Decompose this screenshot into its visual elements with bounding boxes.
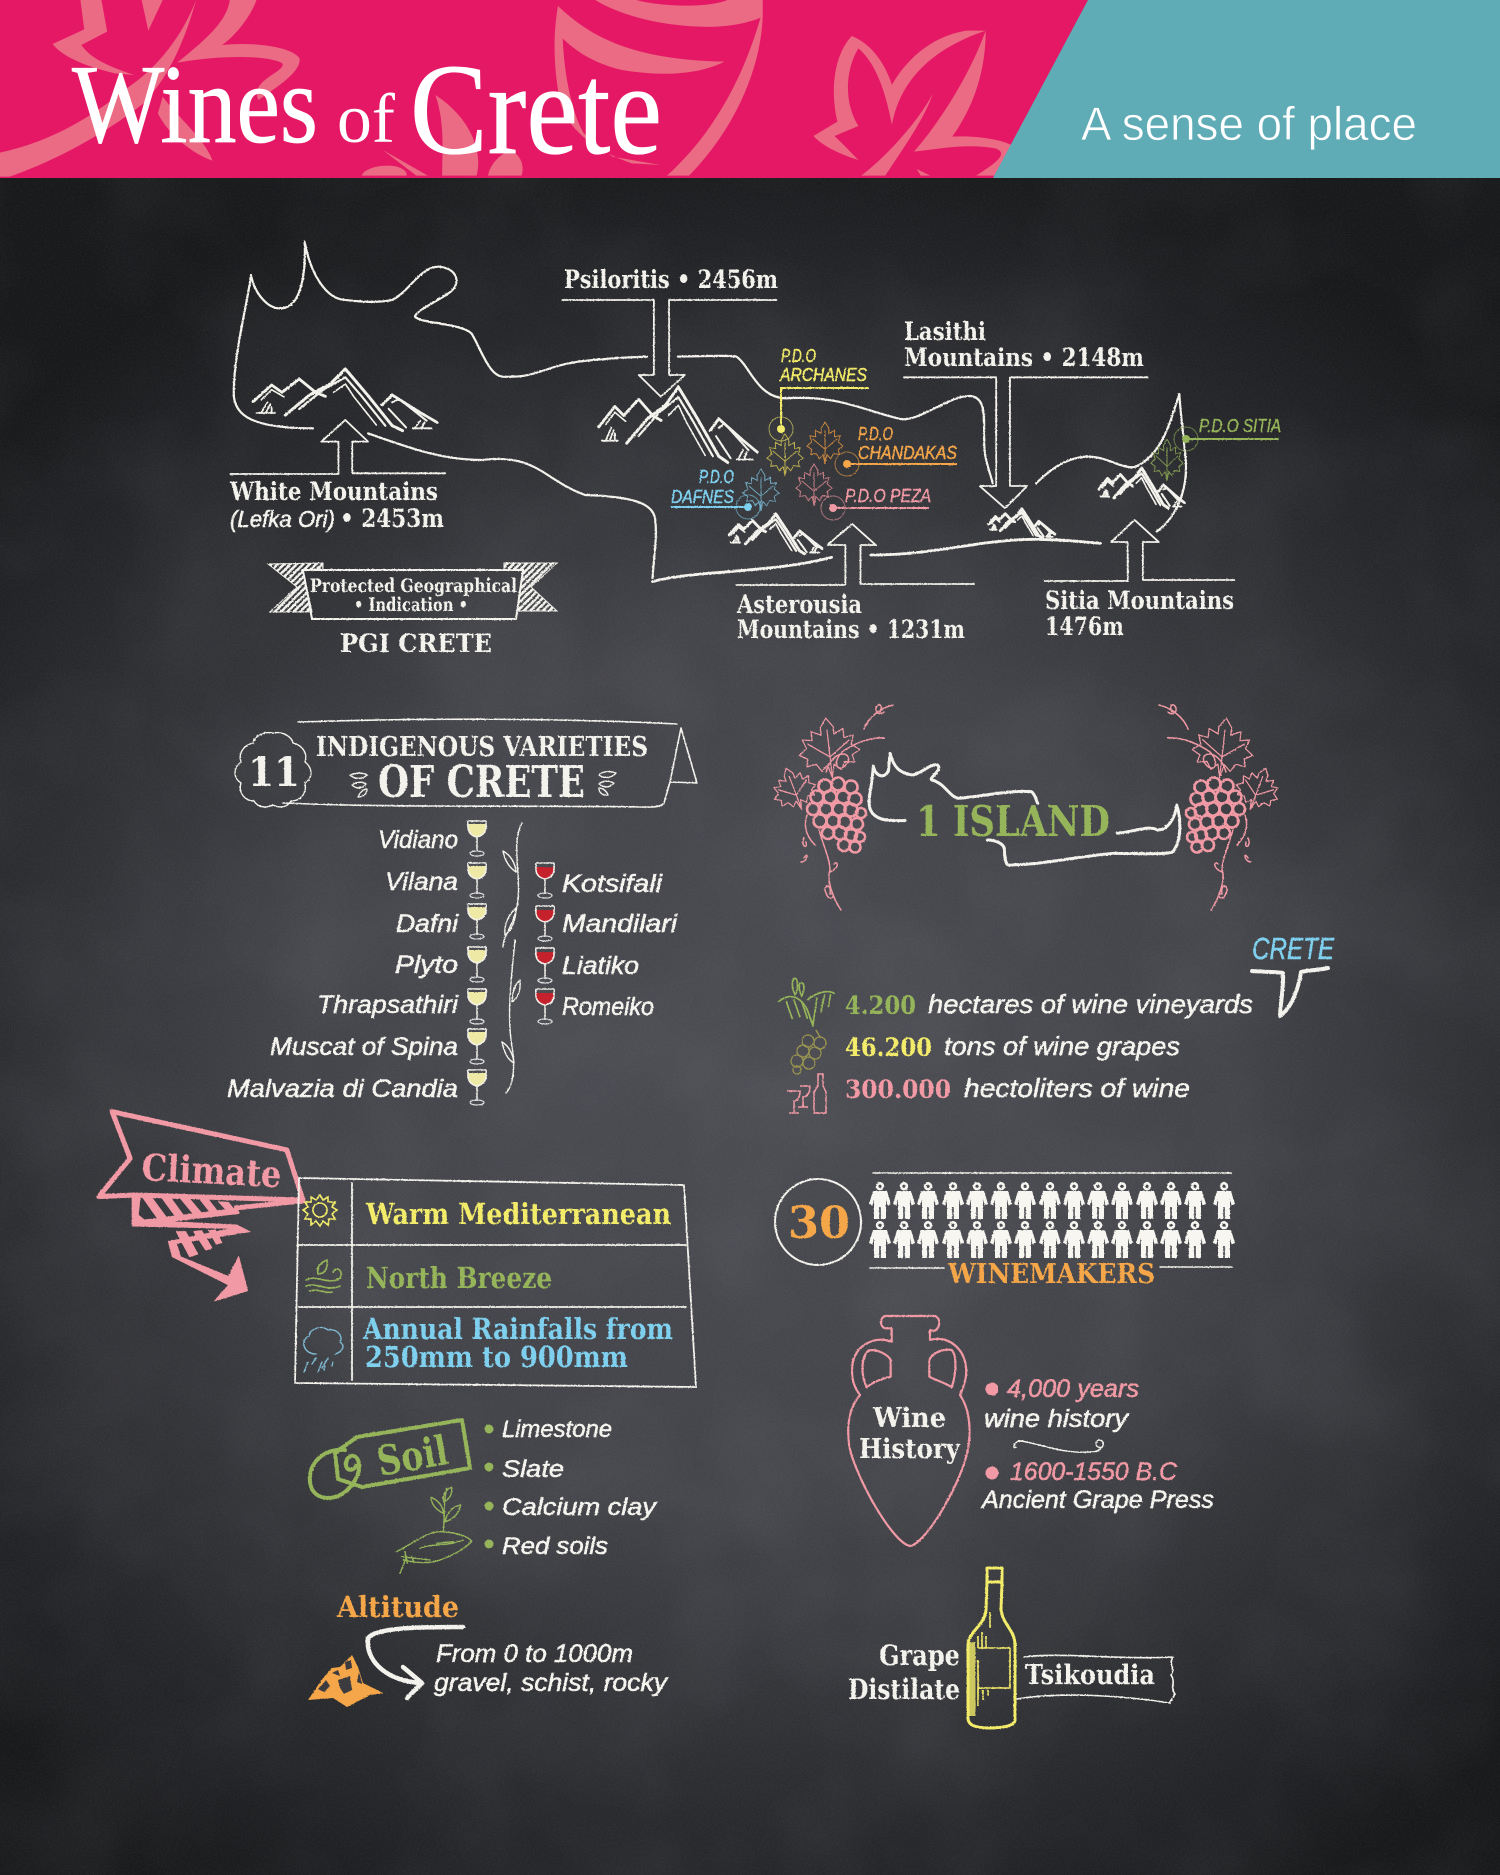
mountain labels: Psiloritis • 2456m: [564, 265, 778, 294]
climate flag: Climate: [141, 1145, 283, 1196]
ribbon shape: [268, 563, 557, 619]
scalloped badge: [235, 733, 311, 807]
CRETE callout: [1252, 931, 1334, 1016]
panel: winemakers: [775, 1173, 1235, 1290]
stat: grapes: [791, 1030, 1180, 1074]
white varieties: Vidiano: [378, 826, 458, 854]
climate table: [295, 1178, 696, 1387]
panel: wine history: [848, 1316, 1214, 1546]
stat: wine: 300.000: [845, 1075, 951, 1104]
red varieties: Kotsifali: [562, 870, 664, 898]
red varieties: [562, 870, 679, 1021]
map of Crete with mountains: [229, 242, 1281, 644]
stat: wine: hectoliters of wine: [964, 1073, 1190, 1103]
chalk content: [99, 242, 1334, 1728]
PGI label: PGI CRETE: [340, 629, 492, 658]
soil list: Limestone: [502, 1416, 612, 1443]
stat: vineyards: 4.200: [845, 991, 916, 1020]
mountain labels: Sitia Mountains: [1045, 586, 1234, 615]
PDO labels: CHANDAKAS: [858, 443, 957, 463]
varieties ribbon heading: [235, 719, 697, 808]
panel: 1 island: [766, 705, 1334, 1113]
icon: bottle: [968, 1568, 1015, 1728]
ribbon text: • Indication •: [354, 594, 468, 616]
red wine glasses: [536, 863, 554, 1024]
mountain labels: Mountains • 2148m: [904, 343, 1144, 372]
panel: winemakers: WINEMAKERS: [947, 1259, 1155, 1290]
PDO labels: P.D.O: [858, 424, 893, 444]
white varieties: Malvazia di Candia: [227, 1075, 458, 1103]
mountain labels: Mountains • 1231m: [737, 615, 965, 644]
bottle caption: Distilate: [848, 1673, 960, 1706]
rules: [870, 1173, 1232, 1268]
climate text: North Breeze: [366, 1261, 552, 1295]
PDO labels: P.D.O SITIA: [1199, 416, 1281, 436]
amphora label: Wine: [872, 1403, 946, 1434]
mountain icons: [253, 369, 1184, 554]
climate text: Annual Rainfalls from: [362, 1312, 673, 1346]
varieties ribbon heading: 11: [248, 749, 300, 796]
history facts: 1600-1550 B.C: [1010, 1458, 1178, 1486]
PGI Crete ribbon: [268, 563, 557, 658]
climate text: Warm Mediterranean: [365, 1197, 671, 1231]
PDO leaves: [743, 422, 1183, 511]
ribbon text: Protected Geographical: [310, 575, 517, 597]
Tsikoudia ribbon: Tsikoudia: [1025, 1660, 1155, 1691]
white varieties: Dafni: [396, 910, 460, 938]
PDO pointers: [671, 388, 1279, 520]
mountain labels: White Mountains: [229, 477, 438, 506]
panel: altitude: From 0 to 1000m: [436, 1640, 633, 1668]
history facts: [980, 1375, 1214, 1514]
badge: [775, 1179, 861, 1265]
mountain labels: Lasithi: [904, 317, 986, 346]
panel: indigenous varieties: [227, 719, 697, 1105]
stat: grapes: 46.200: [845, 1033, 932, 1062]
panel: altitude: Altitude: [336, 1590, 459, 1624]
people pictogram: [869, 1182, 1235, 1258]
title: of: [337, 81, 396, 158]
varieties ribbon heading: OF CRETE: [378, 757, 585, 808]
bottle caption: Grape: [879, 1639, 960, 1672]
amphora label: [859, 1403, 961, 1465]
white varieties: Plyto: [395, 951, 458, 979]
PDO labels: P.D.O: [699, 467, 734, 487]
panel: soil: Soil: [373, 1426, 452, 1486]
PDO labels: P.D.O PEZA: [845, 486, 931, 506]
PDO labels: P.D.O: [781, 346, 816, 366]
arrow: [368, 1627, 463, 1698]
icon: sun: [303, 1195, 337, 1226]
soil tag: [310, 1420, 470, 1498]
panel: soil: [310, 1416, 658, 1573]
soil list: Slate: [502, 1456, 564, 1483]
climate text: [362, 1197, 673, 1374]
panel: climate: [99, 1112, 696, 1387]
mountain labels: Asterousia: [736, 590, 862, 619]
ribbon text: [310, 575, 517, 616]
history facts: wine history: [984, 1405, 1130, 1433]
white varieties: Muscat of Spina: [270, 1033, 458, 1061]
Tsikoudia ribbon: [1017, 1655, 1175, 1703]
mountain labels: (Lefka Ori): [230, 506, 335, 532]
red varieties: Mandilari: [562, 910, 679, 938]
teal tagline panel: [993, 0, 1500, 178]
title: Crete: [410, 38, 662, 182]
white varieties: [227, 826, 460, 1103]
icon: rain cloud: [304, 1328, 343, 1372]
island outline and pointer arrows: [230, 242, 1234, 585]
varieties ribbon heading: INDIGENOUS VARIETIES: [316, 732, 648, 763]
title: [72, 38, 662, 182]
header leaf decoration: [0, 0, 1014, 177]
mountain labels: 1476m: [1045, 612, 1124, 641]
island outline: [869, 753, 1180, 865]
panel: altitude: [308, 1590, 669, 1707]
mountain labels: • 2453m: [340, 504, 444, 533]
panel: winemakers: 30: [788, 1198, 850, 1249]
climate flag: [99, 1112, 305, 1301]
white varieties: Thrapsathiri: [317, 991, 460, 1019]
red varieties: Liatiko: [562, 952, 639, 980]
icon: hand with sprout: [397, 1487, 472, 1573]
white wine glasses: [468, 821, 486, 1105]
tagline: A sense of place: [1081, 97, 1417, 150]
1 island heading: 1 ISLAND: [916, 797, 1110, 846]
stat: vineyards: [779, 978, 1253, 1027]
soil list: Calcium clay: [502, 1494, 658, 1521]
soil list: [485, 1416, 658, 1560]
stat: vineyards: hectares of wine vineyards: [928, 989, 1253, 1019]
bottle caption: [848, 1639, 960, 1706]
white varieties: Vilana: [385, 868, 458, 896]
icon: rocks: [308, 1655, 383, 1707]
red varieties: Romeiko: [562, 993, 654, 1021]
stat: grapes: tons of wine grapes: [944, 1031, 1180, 1061]
PDO labels: [671, 346, 1281, 507]
grape vines: [766, 705, 1286, 910]
panel: grape distilate: [848, 1568, 1175, 1728]
title: Wines: [72, 43, 318, 167]
stat: wine: [787, 1073, 1190, 1113]
soil list: Red soils: [502, 1533, 608, 1560]
panel: altitude: gravel, schist, rocky: [434, 1669, 669, 1697]
mountain labels: [229, 265, 1234, 644]
CRETE callout: CRETE: [1252, 931, 1334, 966]
header banner: [0, 0, 1500, 182]
vine divider: [502, 823, 522, 1093]
PDO labels: ARCHANES: [779, 365, 867, 385]
PDO labels: DAFNES: [671, 487, 734, 507]
history facts: 4,000 years: [1007, 1375, 1139, 1403]
amphora label: History: [859, 1434, 961, 1465]
amphora: [848, 1316, 970, 1546]
climate text: 250mm to 900mm: [365, 1340, 628, 1374]
icon: breeze: [306, 1260, 341, 1292]
history facts: Ancient Grape Press: [980, 1486, 1214, 1514]
